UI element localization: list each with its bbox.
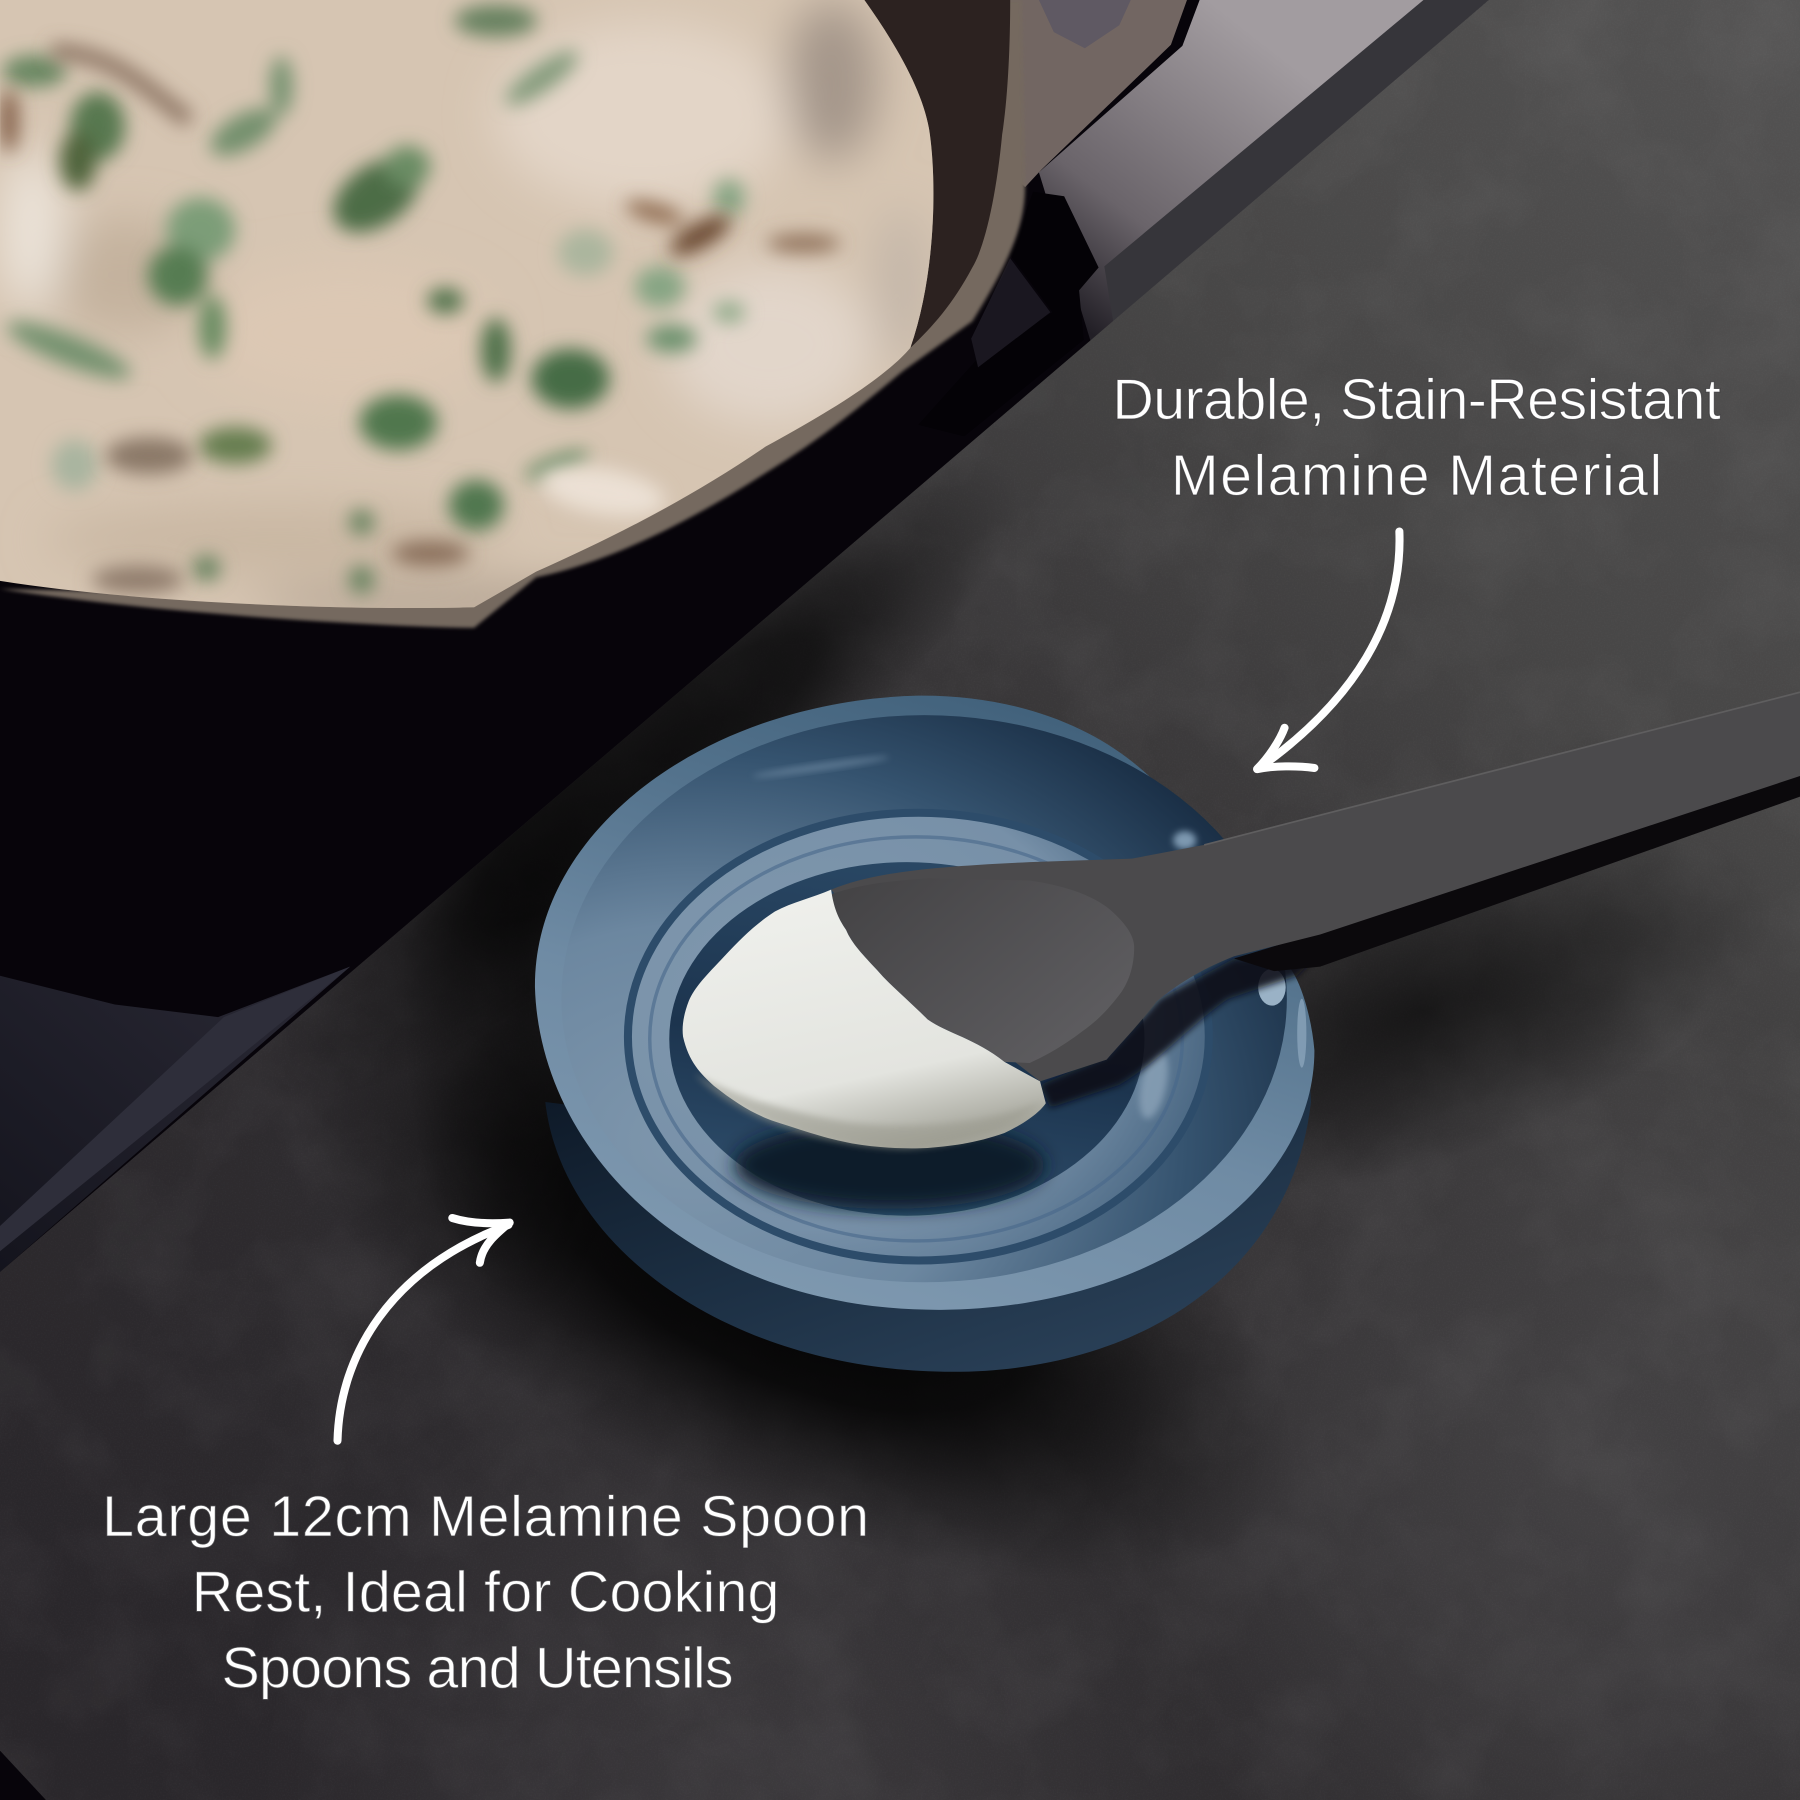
hob surface: lower left corner [0, 967, 350, 1272]
spoon handle and head [831, 692, 1800, 1081]
callout text: durable material: Melamine Material [1171, 444, 1662, 508]
glossy highlights and reflections [752, 754, 1306, 1121]
pan handle opening [971, 258, 1050, 367]
callout text: large spoon rest: Large 12cm Melamine Spoon [102, 1485, 869, 1549]
spoon rest well [561, 715, 1287, 1282]
pan inner wall [864, 0, 1010, 348]
callout text: large spoon rest: Spoons and Utensils [222, 1637, 734, 1701]
callout text: large spoon rest [102, 1485, 869, 1700]
blurred herbs [2, 5, 745, 593]
callout text: durable material: Durable, Stain-Resistant [1112, 368, 1721, 432]
spoon rest base [545, 1056, 1311, 1372]
spoon rest [535, 696, 1314, 1372]
spoon rest rim [535, 696, 1314, 1310]
cream underside shading [695, 1073, 1042, 1149]
spoon neck shadow [1040, 953, 1320, 1108]
spoon rest centre [669, 862, 1145, 1216]
spoon underside [1234, 771, 1800, 971]
callout: large spoon rest [102, 1218, 869, 1700]
hob surface: glossy upper strip [1039, 0, 1489, 341]
spoon rest ring groove [650, 837, 1182, 1241]
arrow: pointing to spoon rest rim [1257, 532, 1400, 769]
callout text: durable material [1112, 368, 1721, 508]
skillet pan [0, 0, 1187, 628]
soup surface [0, 0, 953, 620]
cooking spoon [683, 692, 1800, 1149]
callout text: large spoon rest: Rest, Ideal for Cooking [192, 1561, 779, 1625]
spoon rest outer ring [628, 813, 1209, 1260]
pan outer rim [0, 0, 1025, 628]
spoon handle faint upper edge [1204, 692, 1800, 845]
dark centre shadow [735, 1122, 1045, 1209]
blurred mushrooms [0, 52, 840, 593]
cream on spoon [683, 890, 1046, 1148]
pan rear lug handle [987, 0, 1187, 187]
arrow: pointing to spoon rest size [338, 1218, 510, 1441]
spoon bowl recess [831, 878, 1134, 1063]
pan handle loop [918, 192, 1099, 436]
callout: durable material [1112, 368, 1721, 769]
pan lug hole [1039, 0, 1131, 48]
